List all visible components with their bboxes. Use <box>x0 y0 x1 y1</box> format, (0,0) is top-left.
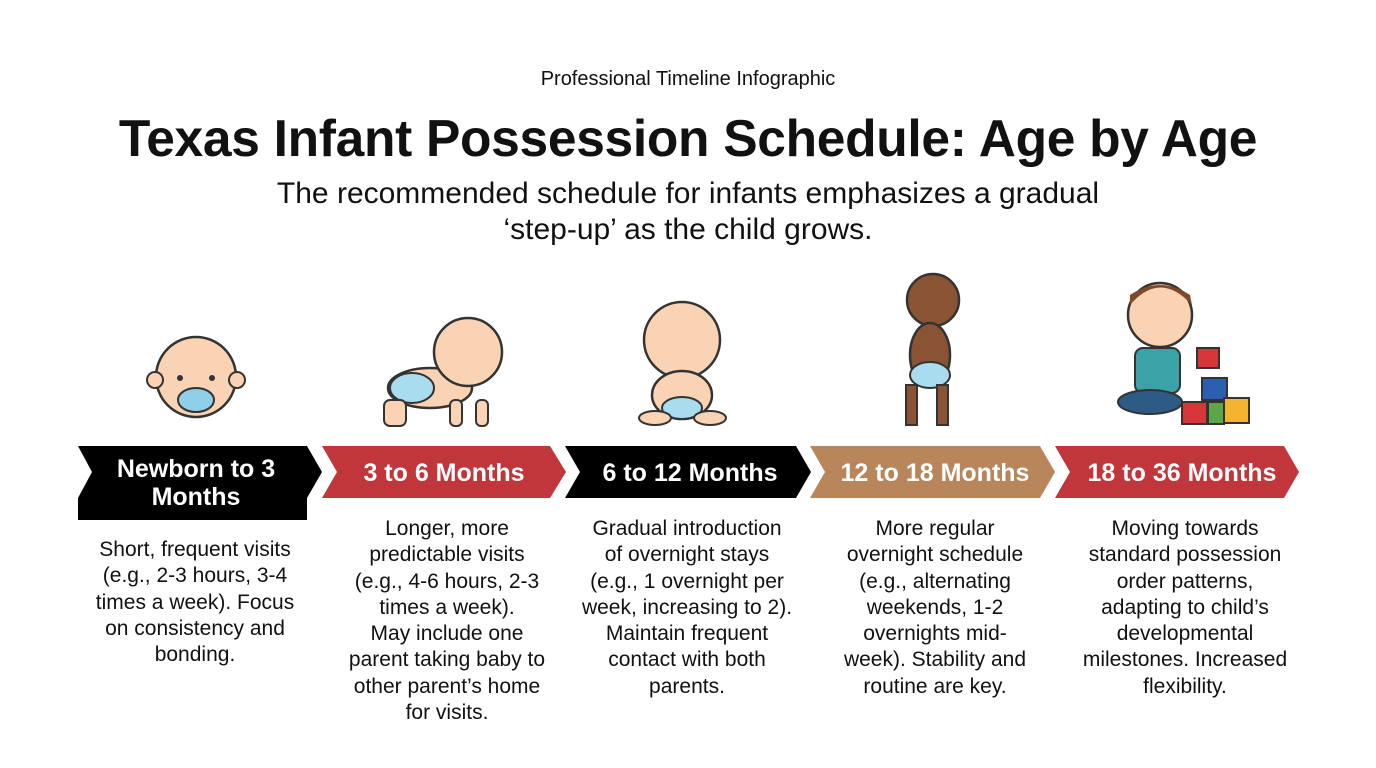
text: 18-36 months <box>1083 517 1287 698</box>
banner 3 <box>565 446 811 498</box>
icon: walking toddler <box>906 274 959 425</box>
text: 3-6 months: predictable visits <box>369 543 525 566</box>
text: 6-12 months: of overnight stays <box>605 543 769 566</box>
text: 18-36 months: milestones. Increased <box>1083 648 1287 671</box>
intro text: The recommended schedule for infants emphasizes a gradual <box>277 177 1099 210</box>
text: 3-6 months: (e.g., 4-6 hours, 2-3 <box>355 570 539 593</box>
text: 12-18 months: More regular <box>875 517 995 540</box>
banner 5 <box>1055 446 1299 498</box>
text: 12-18 months: weekends, 1-2 <box>867 596 1003 619</box>
text: 18-36 months: order patterns, <box>1117 570 1253 593</box>
text: 3-6 months: May include one <box>371 622 523 645</box>
text: 3-6 months: parent taking baby to <box>349 648 545 671</box>
text: 18-36 months: adapting to child’s <box>1101 596 1269 619</box>
text: 12-18 months: overnights mid- <box>863 622 1007 645</box>
text: 6-12 months: contact with both <box>608 648 766 671</box>
icon: crawling baby <box>384 318 502 426</box>
text: 3-6 months <box>349 517 545 724</box>
text: 6-12 months: Maintain frequent <box>606 622 768 645</box>
text: newborn: (e.g., 2-3 hours, 3-4 <box>103 564 287 587</box>
text: 18-36 months: standard possession <box>1089 543 1281 566</box>
text: 18-36 months: Moving towards <box>1111 517 1259 540</box>
intro text: ‘step-up’ as the child grows. <box>503 213 873 246</box>
text: 6-12 months: Gradual introduction <box>592 517 782 540</box>
text: 18-36 months: flexibility. <box>1143 675 1227 698</box>
text: 6-12 months <box>582 517 792 698</box>
text: 12-18 months: (e.g., alternating <box>859 570 1011 593</box>
banner 2 <box>322 446 566 498</box>
icon: sitting baby <box>639 302 726 425</box>
banner 3: 6 to 12 Months <box>602 459 778 487</box>
icon: toddler with blocks <box>1118 283 1249 424</box>
text: 3-6 months: times a week). <box>379 596 515 619</box>
text: 3-6 months: other parent’s home <box>354 675 540 698</box>
intro text <box>277 177 1099 246</box>
text: 3-6 months: for visits. <box>406 701 488 724</box>
banner 1: Months <box>152 483 240 511</box>
text: 12-18 months: week). Stability and <box>844 648 1026 671</box>
text: 12-18 months: routine are key. <box>863 675 1007 698</box>
title: Texas Infant Possession Schedule: Age by Age <box>119 109 1257 167</box>
icon: newborn <box>147 337 245 417</box>
text: newborn: on consistency and <box>105 617 285 640</box>
text: 6-12 months: week, increasing to 2). <box>582 596 792 619</box>
banner 4: 12 to 18 Months <box>841 459 1029 487</box>
text: newborn: Short, frequent visits <box>99 538 291 561</box>
text: 6-12 months: (e.g., 1 overnight per <box>590 570 784 593</box>
banner 4 <box>810 446 1055 498</box>
text: 18-36 months: developmental <box>1117 622 1253 645</box>
banner 5: 18 to 36 Months <box>1088 459 1276 487</box>
text: 6-12 months: parents. <box>649 675 725 698</box>
text: newborn: times a week). Focus <box>96 591 294 614</box>
subtitle: Professional Timeline Infographic <box>541 68 835 90</box>
banner 2: 3 to 6 Months <box>363 459 525 487</box>
banner 1 <box>78 446 322 520</box>
text: newborn: bonding. <box>155 643 235 666</box>
icons: babies <box>146 272 1250 427</box>
text: 3-6 months: Longer, more <box>385 517 509 540</box>
text: newborn <box>96 538 294 666</box>
text: 12-18 months: overnight schedule <box>847 543 1023 566</box>
text: 12-18 months <box>844 517 1026 698</box>
banner 1: Newborn to 3 <box>117 455 275 483</box>
